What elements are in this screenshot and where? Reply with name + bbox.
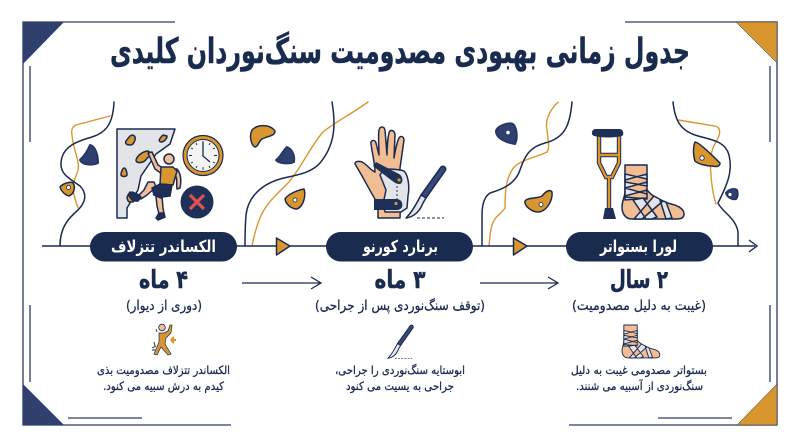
description: سنگ‌نوردی از آسبیه می شنند. <box>576 379 703 394</box>
name pill: برنارد کورنو <box>362 237 438 257</box>
hold: orange right-centre <box>525 191 552 212</box>
panel: Alexander Tetzlaff <box>90 129 237 394</box>
hold: navy top right-centre <box>496 123 517 144</box>
hold: orange centre <box>285 189 305 209</box>
hold: navy right <box>726 189 738 199</box>
subtitle: (توقف سنگ‌نوردی پس از جراحی) <box>315 298 485 314</box>
icon: hand with wrist brace <box>355 127 409 218</box>
duration: ۳ ماه <box>374 265 426 294</box>
icon: scalpel <box>406 166 446 218</box>
icon: no climbing cross <box>180 186 214 218</box>
marker triangle 1 <box>276 238 290 255</box>
icon: clock <box>183 136 223 176</box>
icon: small scalpel <box>388 325 413 358</box>
description <box>97 363 230 394</box>
hold: orange right <box>694 142 720 167</box>
arrow: first to second <box>242 277 321 289</box>
icon: injured climber <box>152 324 176 355</box>
name pill: لورا بستواتر <box>599 237 677 257</box>
hold: navy centre <box>276 147 294 163</box>
name pill <box>566 232 713 262</box>
name pill <box>326 232 473 262</box>
icon: climbing wall and climber <box>117 129 181 220</box>
timeline <box>42 238 757 255</box>
description: ابوستایه سنگ‌نوردی را جراحی، <box>335 363 465 378</box>
duration: ۴ ماه <box>139 265 188 294</box>
icon: crutch <box>592 129 623 219</box>
description: جراحی به یسیت می کنود <box>346 379 454 394</box>
arrow: second to third <box>480 277 558 289</box>
marker triangle 2 <box>514 238 527 255</box>
description <box>335 363 465 394</box>
hold: orange left <box>60 182 74 196</box>
duration: ۲ سال <box>610 265 668 294</box>
subtitle: (غیبت به دلیل مصدومیت) <box>572 298 706 314</box>
icon: small bandaged foot <box>622 325 660 358</box>
name pill <box>90 232 237 262</box>
description: بستواتر مصدومی غیبت به دلیل <box>571 363 707 378</box>
hold: navy left <box>80 145 98 165</box>
subtitle: (دوری از دیوار) <box>126 298 202 314</box>
description: کیدم به درش سبیه می کنود. <box>103 379 224 394</box>
name pill: الکساندر تتزلاف <box>111 237 216 257</box>
panel: Bernard Corno <box>315 127 485 394</box>
background climbing route curves <box>60 102 738 246</box>
description <box>571 363 707 394</box>
panel: Laura Bastwater <box>566 129 713 394</box>
hold: orange top centre <box>251 126 275 147</box>
description: الکساندر تتزلاف مصدومیت بذی <box>97 363 230 378</box>
icon: bandaged foot <box>622 165 684 219</box>
